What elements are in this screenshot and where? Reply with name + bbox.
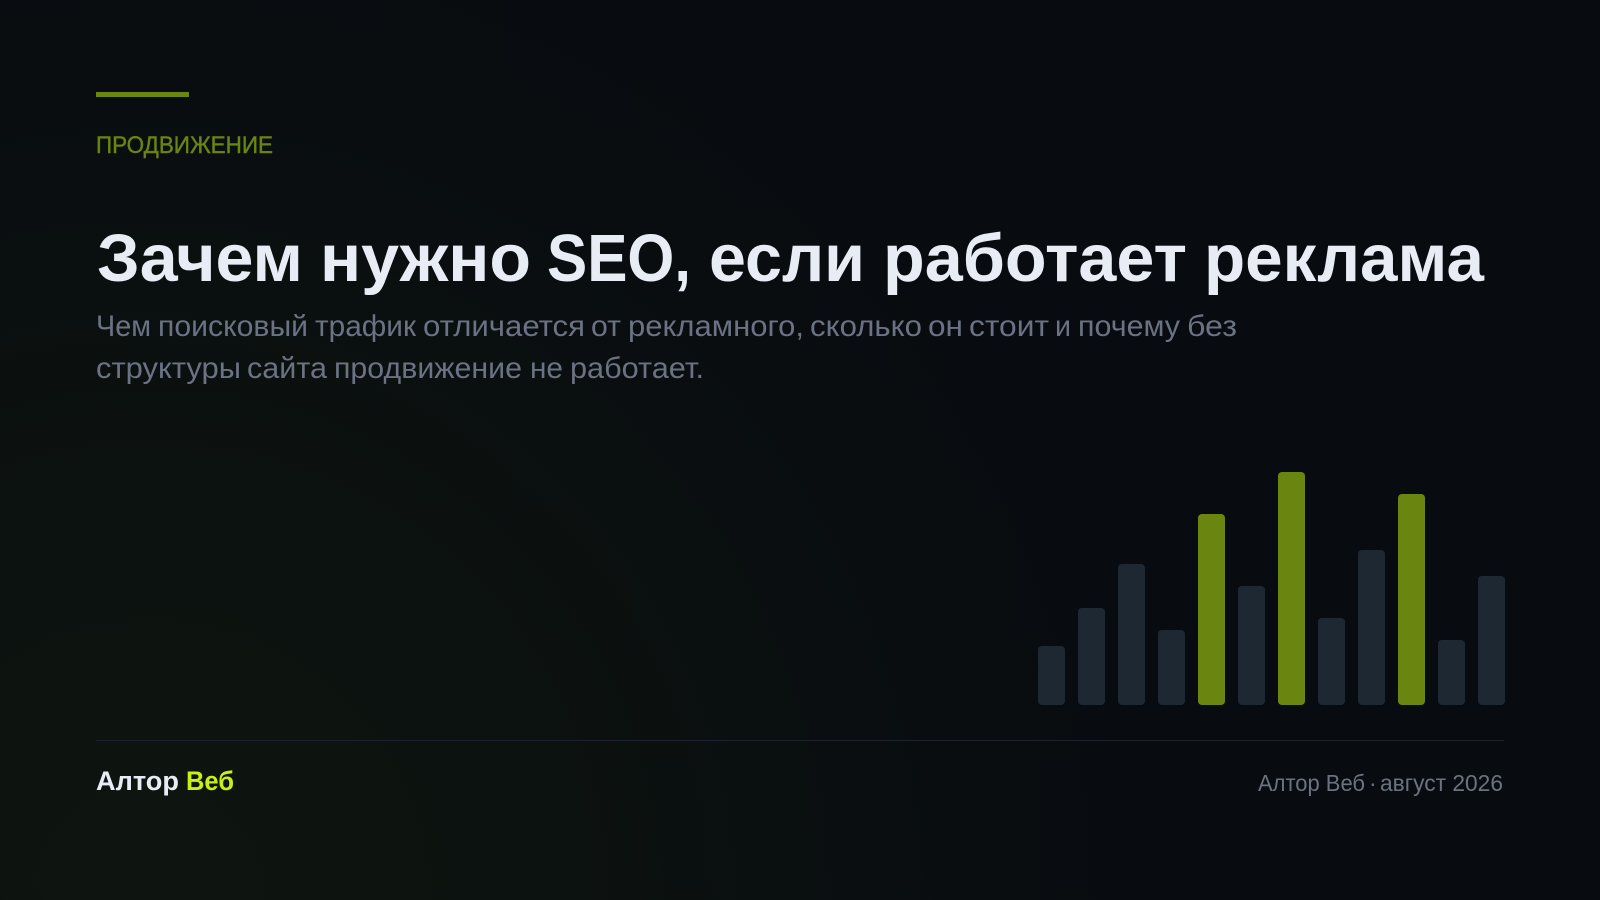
subtitle: от bbox=[591, 310, 621, 343]
logo: Алтор Веб bbox=[96, 766, 234, 796]
bar chart bbox=[1038, 472, 1505, 705]
title: реклама bbox=[1204, 221, 1485, 296]
subtitle: поисковый bbox=[158, 310, 308, 343]
subtitle: рекламного, bbox=[628, 310, 804, 343]
eyebrow label: ПРОДВИЖЕНИЕ bbox=[96, 132, 273, 159]
title bbox=[97, 221, 1485, 296]
subtitle: Чем bbox=[96, 310, 151, 343]
subtitle: структуры bbox=[96, 352, 241, 385]
subtitle bbox=[96, 310, 1237, 385]
logo: Алтор Веб: Алтор bbox=[96, 766, 179, 796]
footer credit: август 2026 bbox=[1380, 770, 1503, 796]
title: работает bbox=[883, 221, 1187, 296]
subtitle: и bbox=[1055, 310, 1071, 343]
subtitle: продвижение bbox=[334, 352, 522, 385]
subtitle: сколько bbox=[810, 310, 922, 343]
title: Зачем bbox=[97, 221, 303, 296]
logo: Алтор Веб: Веб bbox=[186, 766, 234, 796]
subtitle: стоит bbox=[969, 310, 1049, 343]
subtitle: он bbox=[928, 310, 963, 343]
subtitle: почему bbox=[1078, 310, 1180, 343]
subtitle: не bbox=[530, 352, 563, 385]
subtitle: работает. bbox=[570, 352, 704, 385]
subtitle: без bbox=[1187, 310, 1237, 343]
footer credit: Алтор Веб bbox=[1258, 770, 1365, 796]
footer credit bbox=[1258, 770, 1503, 796]
footer credit: · bbox=[1369, 770, 1377, 796]
subtitle: трафик bbox=[315, 310, 417, 343]
title: нужно bbox=[320, 221, 531, 296]
title: SEO, bbox=[547, 221, 691, 296]
accent bar bbox=[96, 92, 189, 97]
title: если bbox=[709, 221, 865, 296]
subtitle: отличается bbox=[423, 310, 585, 343]
subtitle: сайта bbox=[247, 352, 327, 385]
